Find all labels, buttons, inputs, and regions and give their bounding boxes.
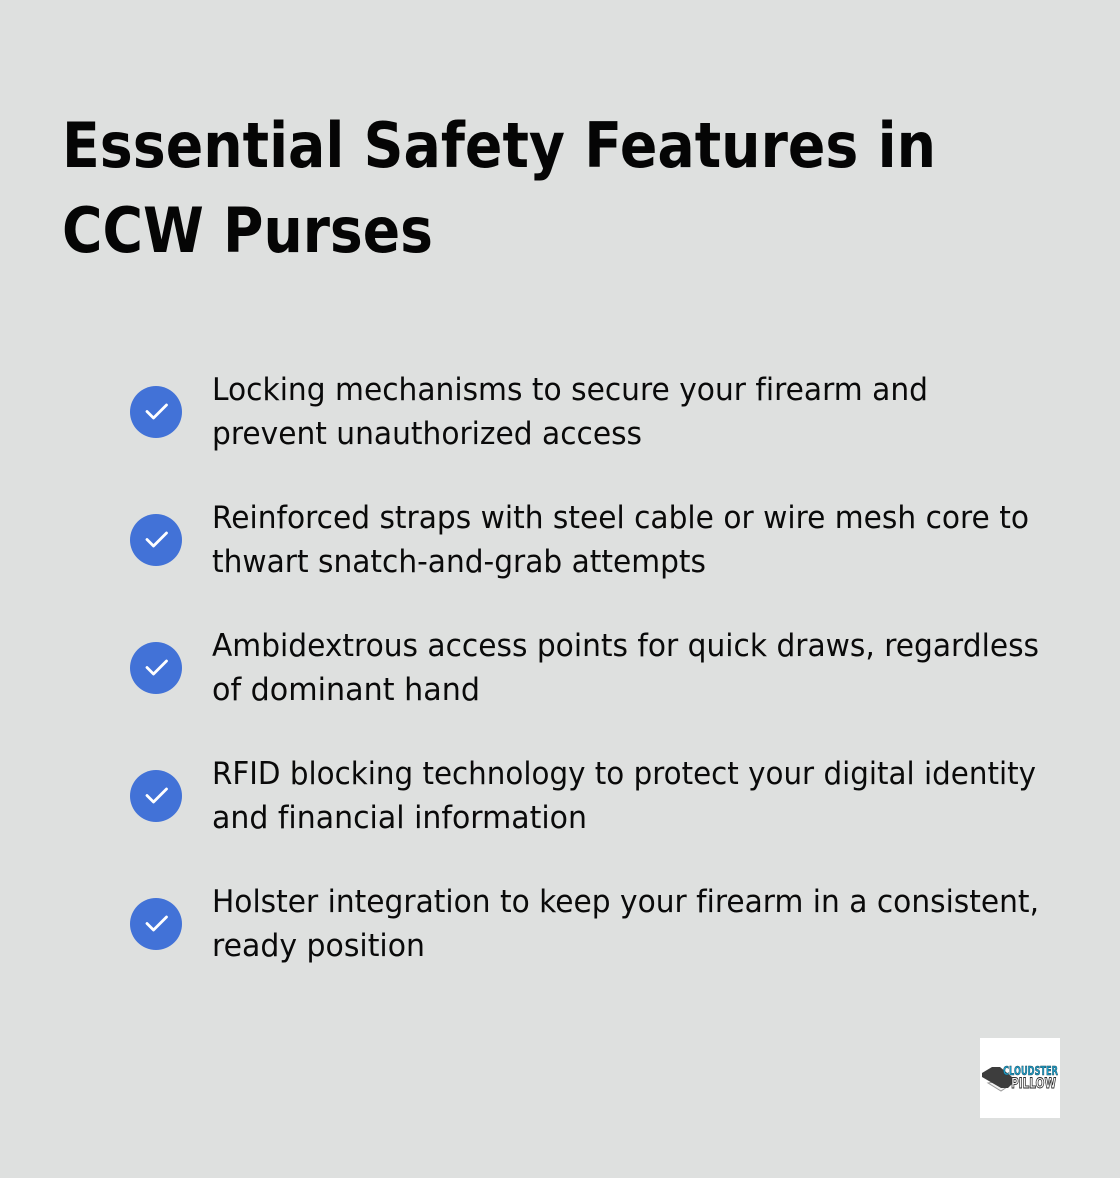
item 1: locking mechanisms — [130, 372, 928, 452]
icon: pillow — [982, 1067, 1013, 1091]
logo: Cloudster Pillow: PILLOW — [1011, 1076, 1056, 1092]
item 5: holster integration — [130, 884, 1039, 964]
icon: check badge — [130, 770, 182, 822]
item text — [212, 756, 1036, 836]
item text: Locking mechanisms to secure your firearm and — [212, 372, 928, 408]
icon: check badge — [130, 898, 182, 950]
logo: Cloudster Pillow: CLOUDSTER — [1003, 1064, 1058, 1078]
icon: check badge — [130, 386, 182, 438]
item text: prevent unauthorized access — [212, 416, 642, 452]
item text — [212, 500, 1029, 580]
title: CCW Purses — [62, 194, 433, 267]
title — [62, 109, 936, 267]
item text: RFID blocking technology to protect your digital identity — [212, 756, 1036, 792]
item text — [212, 372, 928, 452]
item text: and financial information — [212, 800, 587, 836]
item text: Holster integration to keep your firearm in a consistent, — [212, 884, 1039, 920]
item text — [212, 884, 1039, 964]
logo: Cloudster Pillow — [980, 1038, 1060, 1118]
icon: check badge — [130, 642, 182, 694]
item text: ready position — [212, 928, 425, 964]
item text — [212, 628, 1039, 708]
checklist — [130, 372, 1039, 964]
item 3: ambidextrous access — [130, 628, 1039, 708]
item text: Ambidextrous access points for quick draws, regardless — [212, 628, 1039, 664]
item 2: reinforced straps — [130, 500, 1029, 580]
title: Essential Safety Features in — [62, 109, 936, 182]
item text: thwart snatch-and-grab attempts — [212, 544, 706, 580]
icon: check badge — [130, 514, 182, 566]
item text: of dominant hand — [212, 672, 480, 708]
item 4: RFID blocking — [130, 756, 1036, 836]
item text: Reinforced straps with steel cable or wire mesh core to — [212, 500, 1029, 536]
